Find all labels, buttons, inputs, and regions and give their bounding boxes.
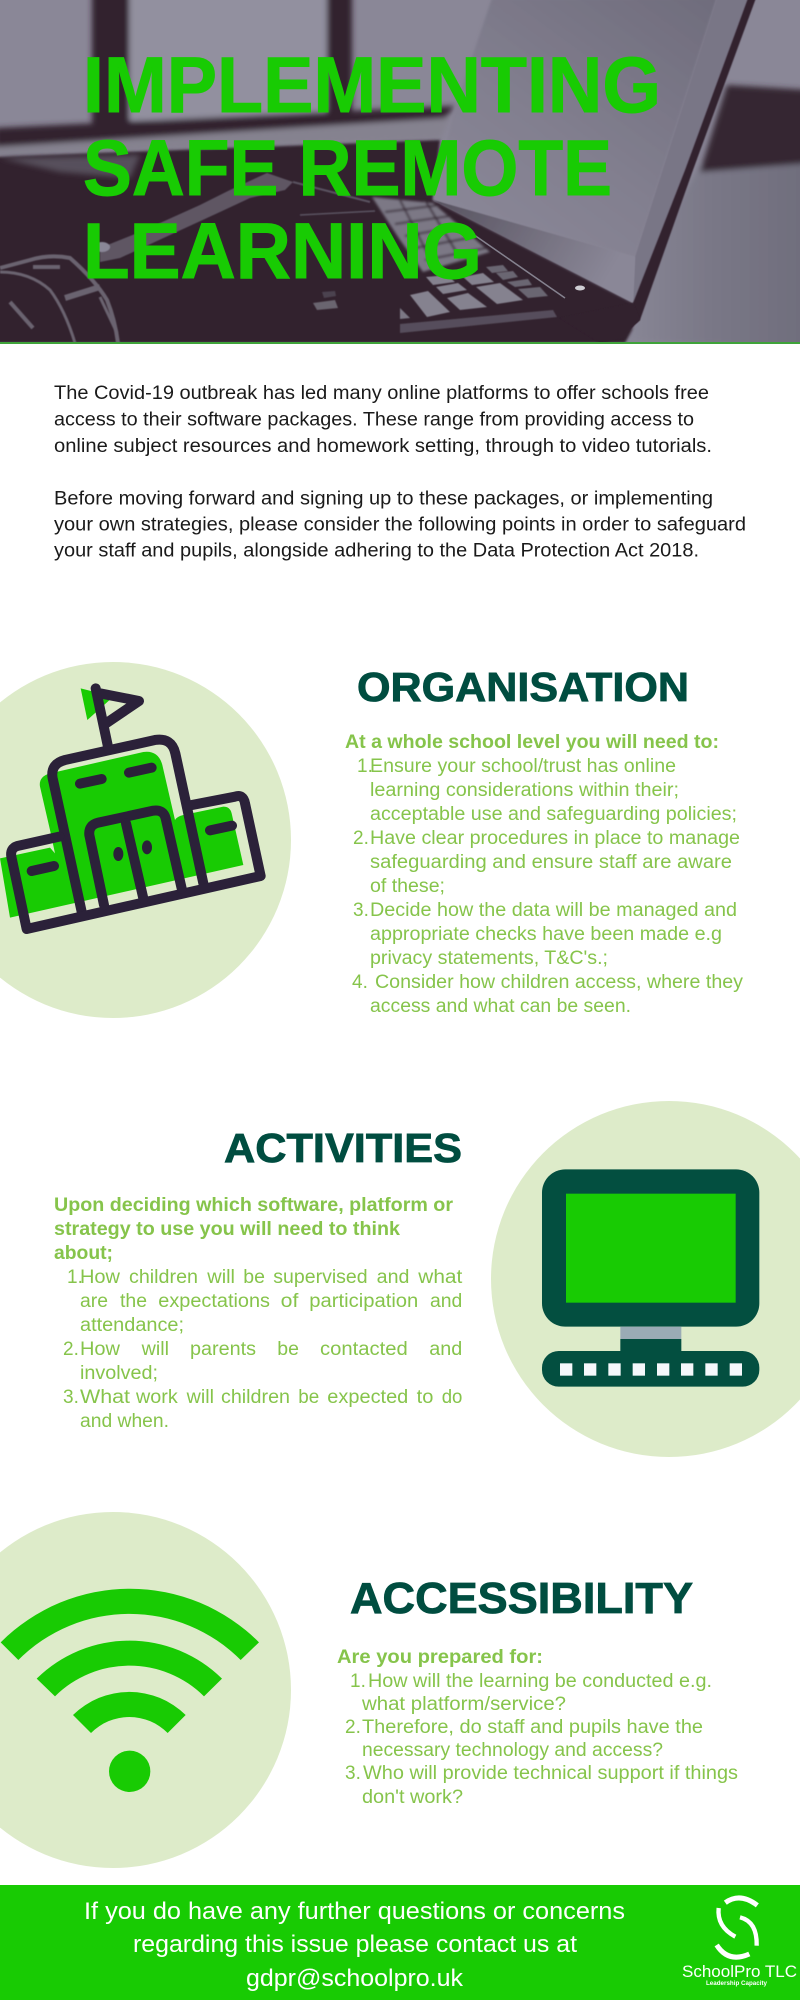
title <box>83 40 661 295</box>
activities text: 3. <box>63 1387 79 1408</box>
activities text: supervised <box>273 1267 368 1288</box>
intro text: Before moving forward and signing up to these packages, or implementing <box>54 488 713 510</box>
organisation text: 2. <box>353 828 369 849</box>
logo: SchoolPro TLC: SchoolPro TLC <box>682 1962 797 1981</box>
intro text: The Covid-19 outbreak has led many online platforms to offer schools free <box>54 383 709 404</box>
organisation text: access and what can be seen. <box>370 996 631 1017</box>
activities text: expectations <box>158 1291 270 1312</box>
activities text: strategy to use you will need to think <box>54 1219 400 1240</box>
activities text: of <box>281 1291 299 1312</box>
accessibility text: 1. <box>350 1671 366 1692</box>
accessibility text: what platform/service? <box>361 1694 566 1715</box>
activities text: involved; <box>80 1363 158 1384</box>
heading: activities: ACTIVITIES <box>224 1125 462 1171</box>
activities text: What <box>80 1387 131 1408</box>
activities text: work <box>135 1387 178 1408</box>
accessibility text: Who will provide technical support if things <box>363 1763 738 1784</box>
activities text: expected <box>327 1387 408 1408</box>
heading: accessibility: ACCESSIBILITY <box>350 1574 693 1623</box>
organisation text: acceptable use and safeguarding policies; <box>370 804 737 825</box>
activities text: are <box>80 1291 108 1312</box>
organisation text: 3. <box>353 900 369 921</box>
activities text: to <box>417 1387 433 1408</box>
title: SAFE REMOTE <box>83 123 612 212</box>
organisation text: safeguarding and ensure staff are aware <box>370 852 732 873</box>
activities text: will <box>206 1267 235 1288</box>
organisation text: Consider how children access, where they <box>375 972 744 993</box>
activities text: be <box>243 1267 265 1288</box>
activities text: Upon deciding which software, platform or <box>54 1195 454 1216</box>
icon: school building <box>0 688 261 929</box>
organisation text: At a whole school level you will need to: <box>345 732 719 753</box>
icon: wifi signal <box>1 1589 259 1792</box>
organisation text: Decide how the data will be managed and <box>370 900 737 921</box>
activities text <box>54 1195 463 1432</box>
activities text: will <box>186 1387 214 1408</box>
activities text: How <box>80 1339 120 1360</box>
activities text: 1. <box>67 1267 83 1288</box>
organisation text: Ensure your school/trust has online <box>370 756 676 777</box>
intro text: your own strategies, please consider the following points in order to safeguard <box>54 514 746 536</box>
activities text: be <box>298 1387 319 1408</box>
panel: activities circle <box>491 1101 800 1457</box>
footer contact text: If you do have any further questions or concerns <box>84 1898 625 1925</box>
organisation text <box>345 732 744 1017</box>
activities text: children <box>221 1387 290 1408</box>
activities text: participation <box>309 1291 418 1312</box>
organisation text: privacy statements, T&C's.; <box>370 948 608 969</box>
organisation text: 4. <box>352 972 368 993</box>
activities text: the <box>120 1291 147 1312</box>
organisation text: appropriate checks have been made e.g <box>370 924 722 945</box>
header photo: laptop and hands <box>0 0 800 350</box>
activities text: do <box>442 1387 462 1408</box>
organisation text: Have clear procedures in place to manage <box>370 828 740 849</box>
accessibility text: don't work? <box>362 1787 463 1808</box>
activities text: will <box>141 1339 169 1360</box>
organisation text: of these; <box>370 876 445 897</box>
organisation text: 1. <box>357 756 373 777</box>
accessibility text: 2. <box>345 1717 361 1738</box>
title: IMPLEMENTING <box>83 40 661 129</box>
footer band <box>0 1885 800 2000</box>
intro text: online subject resources and homework setting, through to video tutorials. <box>54 436 712 457</box>
organisation text: learning considerations within their; <box>370 780 679 801</box>
accessibility text: necessary technology and access? <box>362 1740 663 1761</box>
activities text: be <box>277 1339 299 1360</box>
activities text: How <box>80 1267 120 1288</box>
footer contact text <box>84 1898 625 1992</box>
logo: SchoolPro TLC <box>682 1898 797 1987</box>
accessibility text: Therefore, do staff and pupils have the <box>362 1717 703 1738</box>
intro text: your staff and pupils, alongside adhering to the Data Protection Act 2018. <box>54 540 699 562</box>
intro text: access to their software packages. These range from providing access to <box>54 410 694 430</box>
title: LEARNING <box>83 206 482 295</box>
accessibility text: 3. <box>345 1763 361 1784</box>
activities text: parents <box>190 1339 256 1360</box>
activities text: and when. <box>80 1411 169 1432</box>
activities text: and <box>377 1267 409 1288</box>
footer contact text: regarding this issue please contact us at <box>133 1931 577 1958</box>
activities text: and <box>430 1291 462 1312</box>
logo: SchoolPro TLC: Leadership Capacity <box>706 1980 767 1987</box>
accessibility text: Are you prepared for: <box>337 1647 543 1668</box>
activities text: 2. <box>63 1339 79 1360</box>
footer contact text: gdpr@schoolpro.uk <box>246 1965 464 1992</box>
activities text: contacted <box>320 1339 408 1360</box>
panel: organisation circle <box>0 662 291 1018</box>
activities text: and <box>429 1339 462 1360</box>
panel: accessibility circle <box>0 1512 291 1868</box>
intro text <box>54 383 746 562</box>
activities text: children <box>129 1267 198 1288</box>
activities text: what <box>417 1267 463 1288</box>
activities text: about; <box>54 1243 113 1264</box>
activities text: attendance; <box>80 1315 184 1336</box>
heading: organisation: ORGANISATION <box>357 664 689 710</box>
icon: desktop computer <box>542 1169 759 1387</box>
accessibility text: How will the learning be conducted e.g. <box>368 1671 712 1692</box>
accessibility text <box>337 1647 738 1808</box>
